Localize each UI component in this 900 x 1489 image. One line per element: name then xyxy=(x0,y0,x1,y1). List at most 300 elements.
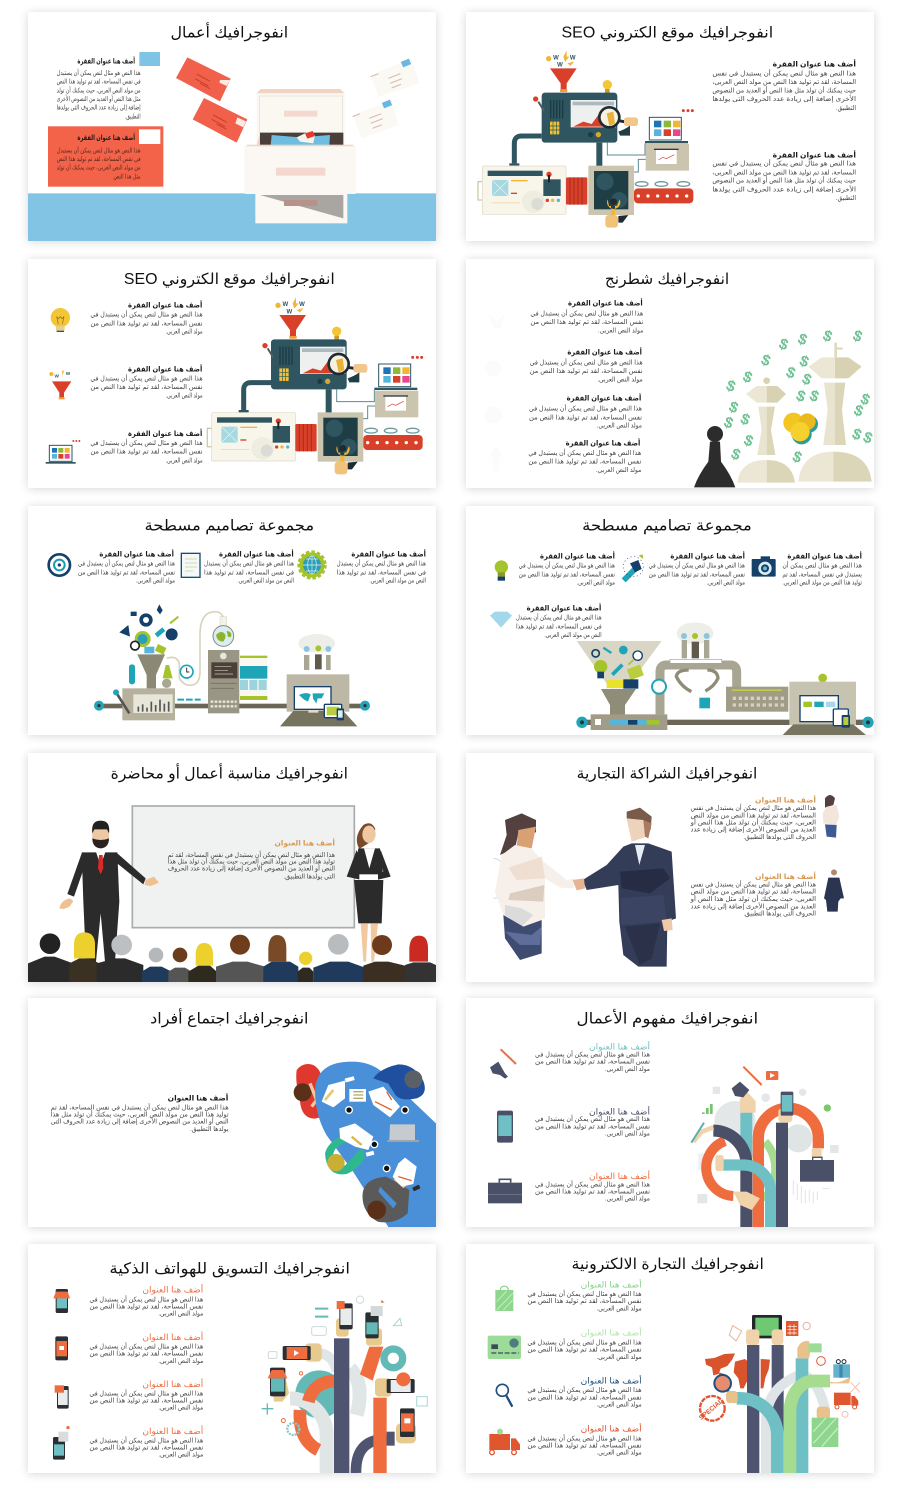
text block 1: مولد النص العربى. xyxy=(598,327,644,334)
dollar signs: $ xyxy=(797,352,812,371)
dollar signs: $ xyxy=(724,377,738,396)
printer box xyxy=(646,144,689,171)
dollar signs xyxy=(721,327,875,467)
heading: أضف هنا عنوان الفقرة xyxy=(773,149,856,159)
text block: diamond: أضف هنا عنوان الفقرة xyxy=(527,603,601,613)
text block: right xyxy=(337,548,426,585)
text block: bulb: مولد النص العربى. xyxy=(577,580,615,587)
panel: e-commerce slide xyxy=(466,1244,874,1473)
icon: funnel: W xyxy=(66,371,71,376)
text block 4: مولد النص العربى. xyxy=(597,1450,642,1457)
text block 4: أضف هنا العنوان xyxy=(142,1425,203,1436)
green person xyxy=(325,1133,365,1174)
icon: light bulb xyxy=(51,308,70,332)
body text: هذا النص هو مثال لنص يمكن أن يستبدل xyxy=(57,68,141,77)
text block: navy: أضف هنا العنوان xyxy=(589,1105,650,1116)
text block: orange: نفس المساحة، لقد تم توليد هذا النص من xyxy=(535,1188,650,1195)
text block 1: مولد النص العربى. xyxy=(158,1311,204,1318)
text block 4 xyxy=(89,1425,204,1459)
tablet with hands xyxy=(746,1315,783,1345)
icon: briefcase xyxy=(488,1179,522,1203)
callout: red paragraph box: من مولد النص العربى، حيث يمكنك أن تولد xyxy=(57,163,141,172)
text block 1 xyxy=(89,1284,204,1318)
body text xyxy=(57,68,141,120)
text block: light bulb xyxy=(90,299,203,336)
text block: laptop: هذا النص هو مثال لنص يمكن أن يستبدل في xyxy=(90,438,203,447)
text block: man: أضف هنا العنوان xyxy=(755,871,816,881)
text block 4 xyxy=(528,438,642,474)
hopper funnel xyxy=(577,641,667,730)
text block: man xyxy=(690,871,816,917)
blue floor band xyxy=(28,193,436,241)
illustration: production line xyxy=(94,604,370,726)
tube, clock and flask xyxy=(162,612,223,688)
text block 4: أضف هنا العنوان xyxy=(581,1422,642,1433)
green arc xyxy=(755,1142,775,1198)
text block: camera xyxy=(782,551,862,587)
text block 1: نفس المساحة، لقد تم توليد هذا النص من xyxy=(527,1298,642,1305)
chess king xyxy=(798,343,872,482)
icon: red envelopes xyxy=(176,57,247,143)
text block: left xyxy=(78,548,175,585)
robot arms xyxy=(676,670,718,692)
callout: red paragraph box: أضف هنا عنوان الفقرة xyxy=(77,132,135,142)
illustration: SEO machine xyxy=(478,51,694,228)
man presenter xyxy=(59,821,159,962)
icon: small man xyxy=(824,869,844,912)
icon: laptop with tiles xyxy=(645,109,694,143)
audience heads xyxy=(40,932,428,966)
dollar signs: $ xyxy=(820,327,835,346)
panel: SEO website slide with two paragraphs xyxy=(466,12,874,241)
title: انفوجرافيك مناسبة أعمال أو محاضرة xyxy=(111,763,348,782)
projection screen xyxy=(132,806,354,928)
text block: light bulb: مولد النص العربى. xyxy=(166,329,203,336)
green chart xyxy=(703,1104,711,1114)
navy vertical arm xyxy=(776,1123,788,1227)
illustration: assembly line xyxy=(576,622,874,735)
text block: man: الحروف التى يولدها التطبيق. xyxy=(743,910,816,917)
pale arm xyxy=(766,1375,825,1473)
text block 1: نفس المساحة، لقد تم توليد هذا النص من xyxy=(89,1303,203,1310)
hand with card xyxy=(797,1341,822,1358)
dark blue person xyxy=(373,1064,425,1099)
text block 2: هذا النص هو مثال لنص يمكن أن يستبدل في xyxy=(527,1337,642,1346)
text block: أضف هنا العنوان xyxy=(168,1093,228,1103)
icon: camera xyxy=(752,556,776,577)
dollar signs: $ xyxy=(738,410,753,429)
text block: يولدها التطبيق. xyxy=(190,1126,229,1133)
teal product box xyxy=(699,698,710,708)
text block: laptop: مولد النص العربى. xyxy=(166,457,203,464)
icons in hopper xyxy=(592,646,644,689)
illustration: hands holding phones xyxy=(262,1296,427,1473)
text block 1: هذا النص هو مثال لنص يمكن أن يستبدل في xyxy=(89,1294,204,1303)
title: انفوجرافيك موقع الكتروني SEO xyxy=(562,24,773,42)
body text: حيث يمكنك أن تولد مثل هذا النص أو العديد من النصوص xyxy=(712,85,856,94)
dollar signs: $ xyxy=(858,390,873,409)
callout: red paragraph box: مثل هذا النص xyxy=(113,173,141,180)
chess queen xyxy=(737,377,795,483)
pale arm left xyxy=(290,1398,327,1473)
orange lower arc xyxy=(706,1141,733,1196)
grey person xyxy=(363,1177,409,1222)
control panel xyxy=(726,687,788,712)
body text xyxy=(712,68,857,112)
panel: business filing cabinet slide xyxy=(28,12,436,241)
gear box with wrench xyxy=(588,166,634,228)
text block: woman xyxy=(690,794,816,841)
teal arm arc xyxy=(723,1165,771,1227)
filing cabinet illustration xyxy=(244,89,356,223)
text block: teal xyxy=(535,1040,650,1073)
output machine with monitor xyxy=(783,674,866,735)
illustration: meeting table from above xyxy=(294,1062,436,1227)
text block 1 xyxy=(530,298,644,334)
icon: phone with video xyxy=(55,1336,68,1360)
calculator xyxy=(786,1321,798,1336)
pipes and cables xyxy=(509,136,647,172)
text block 2: نفس المساحة، لقد تم توليد هذا النص من xyxy=(527,1347,642,1354)
dollar signs: $ xyxy=(784,364,798,383)
pale background icons xyxy=(697,1087,839,1203)
text block: teal: أضف هنا العنوان xyxy=(589,1040,650,1051)
text block 3: نفس المساحة، لقد تم توليد هذا النص من xyxy=(89,1398,203,1405)
text block: orange: هذا النص هو مثال لنص يمكن أن يستبدل في xyxy=(535,1179,650,1188)
dollar signs: $ xyxy=(741,432,756,451)
title: انفوجرافيك التجارة الالكترونية xyxy=(572,1256,764,1273)
panel: chess slide xyxy=(466,259,874,488)
text block: النص أو العديد من النصوص الأخرى إضافة إلى زيادة عدد الحروف التى xyxy=(51,1117,229,1126)
icon: gear with globe xyxy=(299,552,325,578)
text block: هذا النص هو مثال لنص يمكن أن يستبدل في نفس المساحة، لقد تم xyxy=(51,1102,229,1111)
text block: middle: في نفس المساحة، لقد تم توليد هذا xyxy=(204,569,294,576)
text block 4: نفس المساحة، لقد تم توليد هذا النص من xyxy=(89,1445,203,1452)
orange vertical arm xyxy=(373,1398,387,1473)
text block 2 xyxy=(527,1326,642,1361)
icon: funnel: W xyxy=(54,373,59,378)
orange top arc xyxy=(308,1381,335,1402)
text block 2: هذا النص هو مثال لنص يمكن أن يستبدل في xyxy=(89,1341,204,1350)
orange left arc xyxy=(300,1410,318,1450)
text block: first paragraph xyxy=(57,52,160,120)
text block 1: مولد النص العربى. xyxy=(597,1305,642,1312)
text block: left: أضف هنا عنوان الفقرة xyxy=(99,548,174,558)
teal vertical arm xyxy=(796,1358,808,1473)
text block 4: مولد النص العربى. xyxy=(158,1452,204,1459)
text block 3 xyxy=(89,1378,204,1412)
papers xyxy=(322,1076,417,1187)
navy arm arc xyxy=(713,1131,746,1227)
central control panel xyxy=(208,650,239,713)
icon: light bulb on machine xyxy=(603,80,612,93)
text block: camera: هذا النص هو مثال لنص يمكن أن xyxy=(782,561,862,570)
text block 4: هذا النص هو مثال لنص يمكن أن يستبدل في xyxy=(528,448,642,457)
icon: laptop xyxy=(46,440,80,464)
text block 2: أضف هنا العنوان xyxy=(581,1326,642,1337)
text block: orange xyxy=(535,1170,650,1203)
conveyor xyxy=(576,717,874,728)
pen and hand xyxy=(691,1123,713,1143)
icon: green bulb xyxy=(495,560,508,581)
text block: light bulb: نفس المساحة، لقد تم توليد هذا النص من xyxy=(90,320,203,327)
dollar signs: $ xyxy=(740,368,755,387)
bulbs and cloud xyxy=(677,622,713,658)
body text: مثل هذا النص أو العديد من النصوص الأخرى xyxy=(57,94,141,103)
text block: bulb: نفس المساحة، لقد تم توليد هذا النص من xyxy=(519,571,615,578)
callout: red paragraph box: هذا النص هو مثال لنص يمكن أن يستبدل xyxy=(57,145,141,154)
phone xyxy=(412,1185,421,1191)
pale tag icons xyxy=(729,1322,860,1417)
text block: diamond: في نفس المساحة، لقد تم توليد هذا xyxy=(516,623,602,630)
text block: bulb: هذا النص هو مثال لنص يمكن أن يستبدل في xyxy=(519,561,615,570)
body text: المساحة، لقد تم توليد هذا النص من مولد النص العربى، xyxy=(712,79,856,86)
icon: funnel xyxy=(49,371,71,399)
text block 3: مولد النص العربى. xyxy=(597,423,642,430)
green curved arm xyxy=(790,1381,830,1473)
text block 4: هذا النص هو مثال لنص يمكن أن يستبدل في xyxy=(527,1433,642,1442)
handshake xyxy=(733,1192,760,1210)
screen text block: النص أو العديد من النصوص الأخرى إضافة إلى زيادة عدد الحروف xyxy=(168,864,335,873)
text block: light bulb: هذا النص هو مثال لنص يمكن أن يستبدل في xyxy=(90,310,203,319)
text block: laptop: أضف هنا عنوان الفقرة xyxy=(128,428,202,438)
body text: هذا النص هو مثال لنص يمكن أن يستبدل في نفس xyxy=(712,68,857,77)
heading: أضف هنا عنوان الفقرة xyxy=(773,59,856,69)
teal curved arm xyxy=(737,1398,777,1473)
teal globe xyxy=(295,1370,343,1418)
icon: phone xyxy=(497,1111,513,1143)
hand with shopping bag xyxy=(812,1407,838,1447)
text block: camera: أضف هنا عنوان الفقرة xyxy=(787,551,862,561)
text block: orange: أضف هنا العنوان xyxy=(589,1170,650,1181)
title: انفوجرافيك اجتماع أفراد xyxy=(150,1008,308,1028)
briefcase xyxy=(800,1149,834,1182)
icon: pen tool xyxy=(622,554,643,582)
text block: orange: مولد النص العربى. xyxy=(605,1196,650,1203)
text block: light bulb: أضف هنا عنوان الفقرة xyxy=(128,299,202,309)
navy arms xyxy=(747,1345,784,1473)
dollar signs: $ xyxy=(850,327,865,346)
icon: funnel with letters: W xyxy=(570,55,576,61)
text block 4 xyxy=(527,1422,642,1457)
website panel xyxy=(240,656,267,700)
panel: meeting slide xyxy=(28,998,436,1227)
black pawn xyxy=(694,426,735,487)
icon: phone with list xyxy=(53,1426,70,1460)
text block: woman: هذا النص هو مثال لنص يمكن أن يستبدل في نفس xyxy=(691,803,816,812)
text block 2: مولد النص العربى. xyxy=(597,1354,642,1361)
title: مجموعة تصاميم مسطحة xyxy=(582,518,752,535)
left control machine xyxy=(478,166,566,214)
text block: diamond xyxy=(516,603,602,639)
text block: diamond: النص من مولد النص العربى. xyxy=(544,632,602,639)
audience bodies xyxy=(28,957,436,982)
arch pipe and gauge xyxy=(652,659,737,715)
text block 1: هذا النص هو مثال لنص يمكن أن يستبدل في xyxy=(527,1289,642,1298)
title: انفوجرافيك الشراكة التجارية xyxy=(577,765,757,782)
text block: man: العربى، حيث يمكنك أن تولد مثل هذا النص أو xyxy=(690,894,816,903)
text block: man: العديد من النصوص الأخرى إضافة إلى زيادة عدد xyxy=(691,901,816,910)
icon: funnel with letters xyxy=(546,51,577,92)
small floating icons xyxy=(262,1296,427,1435)
text block 3: هذا النص هو مثال لنص يمكن أن يستبدل في xyxy=(89,1388,204,1397)
dollar signs: $ xyxy=(851,402,866,421)
panel: flat design set slide, three items xyxy=(28,506,436,735)
title: مجموعة تصاميم مسطحة xyxy=(144,518,314,535)
icon: shopping bag xyxy=(495,1286,513,1311)
faint ghost icons xyxy=(485,313,505,472)
text block: middle xyxy=(204,548,294,585)
text block: right: في نفس المساحة، لقد تم توليد هذا xyxy=(337,569,426,576)
phones xyxy=(268,1301,415,1446)
gift with scissors xyxy=(830,1360,851,1383)
screen text block: التى يولدها التطبيق. xyxy=(283,873,335,880)
icons falling into funnel xyxy=(119,604,178,655)
output machine with monitor xyxy=(280,634,357,726)
text block 2: نفس المساحة، لقد تم توليد هذا النص من xyxy=(530,368,643,375)
paper charts xyxy=(325,1090,412,1181)
text block 2: نفس المساحة، لقد تم توليد هذا النص من xyxy=(89,1351,203,1358)
text block 1: أضف هنا العنوان xyxy=(142,1284,203,1295)
text block 2: مولد النص العربى. xyxy=(158,1358,204,1365)
text block 3: أضف هنا عنوان الفقرة xyxy=(567,393,641,403)
text block 2: أضف هنا عنوان الفقرة xyxy=(567,347,642,357)
body text: الأخرى إضافة إلى زيادة عدد الحروف التى يولدها xyxy=(712,184,856,193)
red person xyxy=(294,1064,325,1119)
text block: funnel: نفس المساحة، لقد تم توليد هذا النص من xyxy=(90,384,203,391)
text block: توليد هذا النص من مولد النص العربى، حيث يمكنك أن تولد مثل هذا xyxy=(51,1109,229,1118)
icon: phone with mail xyxy=(55,1385,69,1409)
title: انفوجرافيك التسويق للهواتف الذكية xyxy=(109,1260,350,1278)
gold coins xyxy=(783,413,818,444)
text block xyxy=(51,1093,229,1133)
illustration: SEO machine xyxy=(207,297,423,474)
text block: funnel: هذا النص هو مثال لنص يمكن أن يستبدل في xyxy=(90,373,203,382)
body text: التطبيق. xyxy=(836,105,856,112)
text block: second paragraph xyxy=(712,149,857,202)
table xyxy=(315,1062,436,1227)
body text: في نفس المساحة، لقد تم توليد هذا النص xyxy=(57,79,141,86)
low-poly man xyxy=(573,808,676,967)
orange sleeve xyxy=(360,1347,383,1381)
icon: brush and ink xyxy=(490,1049,516,1079)
main machine body xyxy=(533,93,617,143)
text block: pen xyxy=(649,551,745,587)
text block: funnel: مولد النص العربى. xyxy=(166,392,203,399)
hand on magnifier xyxy=(726,1391,738,1403)
text block: laptop xyxy=(90,428,203,464)
text block: middle: هذا النص هو مثال لنص يمكن أن يستبدل xyxy=(204,559,294,568)
text block 2 xyxy=(89,1331,204,1365)
input machine with chart xyxy=(113,654,175,720)
text block 2: أضف هنا العنوان xyxy=(142,1331,203,1342)
text block: teal: نفس المساحة، لقد تم توليد هذا النص من xyxy=(535,1059,650,1066)
body text: إضافة إلى زيادة عدد الحروف التى يولدها xyxy=(57,105,141,112)
panel: smartphone marketing slide xyxy=(28,1244,436,1473)
dollar signs: $ xyxy=(726,398,741,417)
text block 1: نفس المساحة، لقد تم توليد هذا النص من xyxy=(530,319,643,326)
icon: target xyxy=(49,554,70,576)
panel: SEO website slide with three icons xyxy=(28,259,436,488)
dollar signs: $ xyxy=(721,414,736,433)
text block: teal: مولد النص العربى. xyxy=(605,1066,650,1073)
screen text block: هذا النص هو مثال لنص يمكن أن يستبدل في نفس المساحة، لقد تم xyxy=(168,850,335,859)
dollar signs: $ xyxy=(807,387,822,406)
callout: red paragraph box xyxy=(48,126,163,187)
world map xyxy=(705,1353,770,1388)
icon: diamond xyxy=(490,612,512,628)
text block 3: هذا النص هو مثال لنص يمكن أن يستبدل في xyxy=(529,404,642,413)
text block: right: أضف هنا عنوان الفقرة xyxy=(351,548,426,558)
dollar signs: $ xyxy=(729,445,743,464)
text block: teal: هذا النص هو مثال لنص يمكن أن يستبدل في xyxy=(535,1050,650,1059)
dollar signs: $ xyxy=(776,335,791,354)
title: انفوجرافيك شطرنج xyxy=(605,271,729,289)
icon: credit card xyxy=(488,1336,521,1359)
screen text block: أضف هنا العنوان xyxy=(274,838,335,848)
body text xyxy=(712,159,857,202)
video play icon xyxy=(766,1071,778,1080)
text block 3 xyxy=(527,1374,642,1408)
icon: blue square xyxy=(139,52,160,66)
icon: magnifier xyxy=(496,1384,512,1407)
dollar signs: $ xyxy=(790,448,805,467)
teal pie chart xyxy=(384,1349,403,1368)
icon: magnifier and hand xyxy=(599,107,638,136)
icon: phone with shop xyxy=(53,1289,70,1313)
text block: navy: هذا النص هو مثال لنص يمكن أن يستبدل في xyxy=(535,1114,650,1123)
text block: man: المساحة، لقد تم توليد هذا النص من مولد النص xyxy=(691,889,816,896)
text block 4: هذا النص هو مثال لنص يمكن أن يستبدل في xyxy=(89,1435,204,1444)
text block: pen: نفس المساحة، لقد تم توليد هذا النص من xyxy=(649,571,745,578)
red bellows xyxy=(566,177,587,205)
text block 1: أضف هنا العنوان xyxy=(581,1279,642,1290)
text block: laptop: نفس المساحة، لقد تم توليد هذا النص من xyxy=(90,449,203,456)
text block 1 xyxy=(527,1279,642,1312)
text block: navy: نفس المساحة، لقد تم توليد هذا النص من xyxy=(535,1123,650,1130)
text block 4: أضف هنا عنوان الفقرة xyxy=(566,438,640,448)
text block 3: مولد النص العربى. xyxy=(158,1405,204,1412)
text block: pen: مولد النص العربى. xyxy=(707,580,745,587)
text block: left: هذا النص هو مثال لنص يمكن أن يستبدل في xyxy=(78,559,175,568)
truck xyxy=(834,1393,858,1409)
text block 3: نفس المساحة، لقد تم توليد هذا النص من xyxy=(529,414,642,421)
body text: حيث يمكنك أن تولد مثل هذا النص أو العديد من النصوص xyxy=(712,176,856,185)
laptop xyxy=(387,1124,419,1142)
icon: small woman xyxy=(823,795,839,838)
text block: woman: المساحة، لقد تم توليد هذا النص من مولد النص xyxy=(691,812,816,819)
text block: bulb: أضف هنا عنوان الفقرة xyxy=(540,551,615,561)
hand on teal arm xyxy=(715,1155,724,1171)
dollar signs: $ xyxy=(795,330,810,349)
audience xyxy=(28,932,436,982)
dollar signs: $ xyxy=(800,370,814,389)
text block: camera: يستبدل في نفس المساحة، لقد تم xyxy=(782,571,862,578)
text block 3: أضف هنا العنوان xyxy=(581,1374,642,1385)
illustration: hands and arms xyxy=(691,1067,839,1227)
title: انفوجرافيك مفهوم الأعمال xyxy=(576,1008,758,1028)
text block: middle: النص من مولد النص العربى. xyxy=(237,578,294,585)
pale arm right xyxy=(350,1368,360,1415)
callout: red paragraph box: في نفس المساحة، لقد تم توليد هذا النص xyxy=(57,156,141,163)
woman presenter xyxy=(347,823,391,962)
text block 2: مولد النص العربى. xyxy=(597,376,643,383)
text block: man: هذا النص هو مثال لنص يمكن أن يستبدل في نفس xyxy=(691,879,816,888)
text block 2: هذا النص هو مثال لنص يمكن أن يستبدل في xyxy=(530,357,643,366)
text block 1: أضف هنا عنوان الفقرة xyxy=(568,298,643,308)
text block: woman: أضف هنا العنوان xyxy=(755,794,816,804)
text block 3: نفس المساحة، لقد تم توليد هذا النص من xyxy=(527,1394,642,1401)
